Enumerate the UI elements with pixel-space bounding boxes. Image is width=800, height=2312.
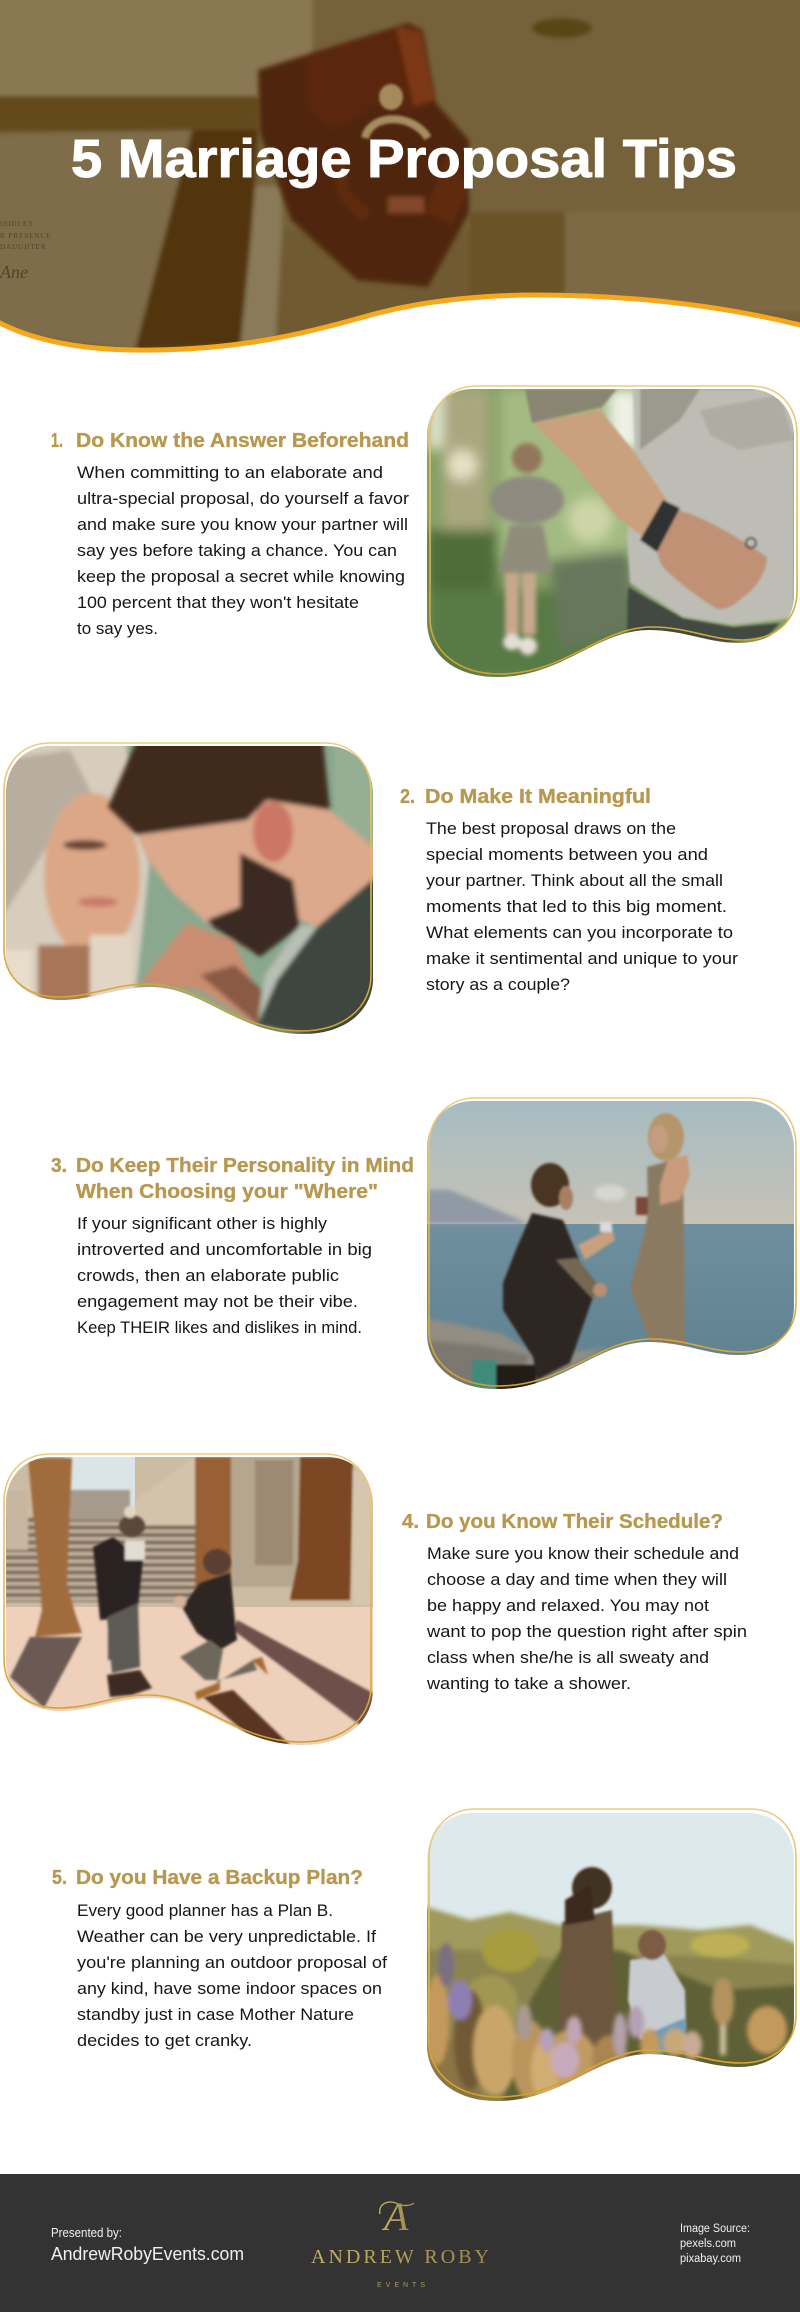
tip 1 heading: Do Know the Answer Beforehand: [76, 430, 409, 452]
tip 2 body: [426, 820, 739, 994]
tip 3 text: [51, 1155, 414, 1337]
footer: [0, 2174, 800, 2312]
tip 4 body: wanting to take a shower.: [426, 1675, 631, 1693]
invitation card text in photo: R PRESENCE: [0, 232, 51, 240]
tip 1 body: 100 percent that they won't hesitate: [77, 594, 359, 612]
tip 4 body: [426, 1545, 747, 1693]
presented by: [51, 2226, 244, 2264]
tip 3 body: crowds, then an elaborate public: [77, 1267, 339, 1285]
image source: pexels.com: [680, 2238, 736, 2250]
tip 2 heading: Do Make It Meaningful: [425, 786, 651, 808]
invitation card text in photo: [0, 220, 51, 282]
tip 4 body: choose a day and time when they will: [427, 1571, 727, 1589]
tip 1 body: say yes before taking a chance. You can: [77, 542, 397, 560]
tip 2 body: What elements can you incorporate to: [426, 924, 733, 942]
logo: Andrew Roby Events: A: [381, 2194, 409, 2239]
gold frame: [429, 1098, 796, 1386]
tip 5 body: [77, 1902, 387, 2050]
gold frame: [429, 1809, 796, 2097]
gold frame: [4, 1454, 371, 1742]
tip 4 body: class when she/he is all sweaty and: [427, 1649, 709, 1667]
presented by: AndrewRobyEvents.com: [51, 2243, 244, 2264]
photo 4: proposal under stone arcade: [4, 1454, 373, 1747]
tip 1 body: and make sure you know your partner will: [77, 516, 408, 534]
tip 3 heading: [51, 1155, 414, 1203]
tip 4 body: be happy and relaxed. You may not: [427, 1597, 709, 1615]
tip 3 heading: Do Keep Their Personality in Mind: [76, 1155, 414, 1177]
orange wave edge: [0, 295, 800, 350]
tip 5 text: [52, 1867, 387, 2050]
invitation card text in photo: ISIDLEY: [0, 220, 34, 228]
gold frame: [430, 386, 797, 674]
invitation card text in photo: Ane: [0, 262, 28, 282]
tip 4 heading: Do you Know Their Schedule?: [426, 1511, 723, 1533]
tip 5 heading: 5.: [52, 1867, 67, 1889]
tip 3 body: introverted and uncomfortable in big: [77, 1241, 372, 1259]
tip 5 body: Every good planner has a Plan B.: [77, 1902, 333, 1920]
tip 2 body: special moments between you and: [426, 846, 708, 864]
invitation card text in photo: DAUGHTER: [0, 243, 46, 251]
tip 2 text: [400, 786, 739, 994]
tip 2 heading: 2.: [400, 786, 415, 808]
tip 4 heading: 4.: [402, 1511, 419, 1533]
tip 5 heading: Do you Have a Backup Plan?: [76, 1867, 363, 1889]
tip 5 body: decides to get cranky.: [77, 2032, 252, 2050]
title: 5 Marriage Proposal Tips: [71, 129, 737, 189]
tip 1 heading: 1.: [51, 430, 63, 452]
tip 1 body: keep the proposal a secret while knowing: [77, 568, 405, 586]
photo: diamond ring: [365, 84, 428, 138]
tip 5 body: standby just in case Mother Nature: [77, 2006, 354, 2024]
tip 2 body: your partner. Think about all the small: [426, 872, 723, 890]
tip 3 heading: 3.: [51, 1155, 67, 1177]
logo: Andrew Roby Events: ANDREW ROBY: [311, 2246, 489, 2268]
white wave: [0, 295, 800, 365]
tip 3 body: [77, 1215, 372, 1337]
tip 5 body: any kind, have some indoor spaces on: [77, 1980, 382, 1998]
header banner: [0, 0, 800, 365]
tip 1 body: to say yes.: [77, 620, 158, 638]
tip 2 body: make it sentimental and unique to your: [426, 950, 739, 968]
photo 2: man kissing woman's hand: [0, 740, 380, 1040]
tip 2 body: The best proposal draws on the: [426, 820, 676, 838]
tip 2 body: story as a couple?: [426, 976, 570, 994]
tip 3 body: engagement may not be their vibe.: [77, 1293, 358, 1311]
tip 1 body: When committing to an elaborate and: [77, 464, 383, 482]
tip 4 body: Make sure you know their schedule and: [427, 1545, 739, 1563]
photo 3: beach proposal: [420, 1098, 796, 1395]
logo: Andrew Roby Events: [311, 2194, 489, 2289]
tip 2 body: moments that led to this big moment.: [426, 898, 727, 916]
tip 1 text: [51, 430, 410, 638]
image source: [680, 2223, 750, 2265]
tip 3 body: If your significant other is highly: [77, 1215, 328, 1233]
logo: Andrew Roby Events: EVENTS: [377, 2282, 425, 2289]
tip 1 body: [77, 464, 410, 638]
image source: Image Source:: [680, 2223, 750, 2235]
tip 5 body: Weather can be very unpredictable. If: [77, 1928, 376, 1946]
gold frame: [4, 743, 371, 1031]
photo: red ring box: [258, 23, 469, 287]
tip 4 body: want to pop the question right after spin: [426, 1623, 747, 1641]
presented by: Presented by:: [51, 2226, 122, 2240]
tip 3 body: Keep THEIR likes and dislikes in mind.: [77, 1319, 362, 1337]
tip 4 text: [402, 1511, 747, 1693]
image source: pixabay.com: [680, 2253, 741, 2265]
tip 3 heading: When Choosing your "Where": [76, 1181, 378, 1203]
tip 5 body: you're planning an outdoor proposal of: [77, 1954, 387, 1972]
photo 5: proposal in lavender field: [420, 1809, 800, 2110]
lavender flowers: [420, 1943, 787, 2110]
photo 1: hand holding ring behind back: [427, 386, 797, 680]
tip 1 body: ultra-special proposal, do yourself a favor: [77, 490, 410, 508]
